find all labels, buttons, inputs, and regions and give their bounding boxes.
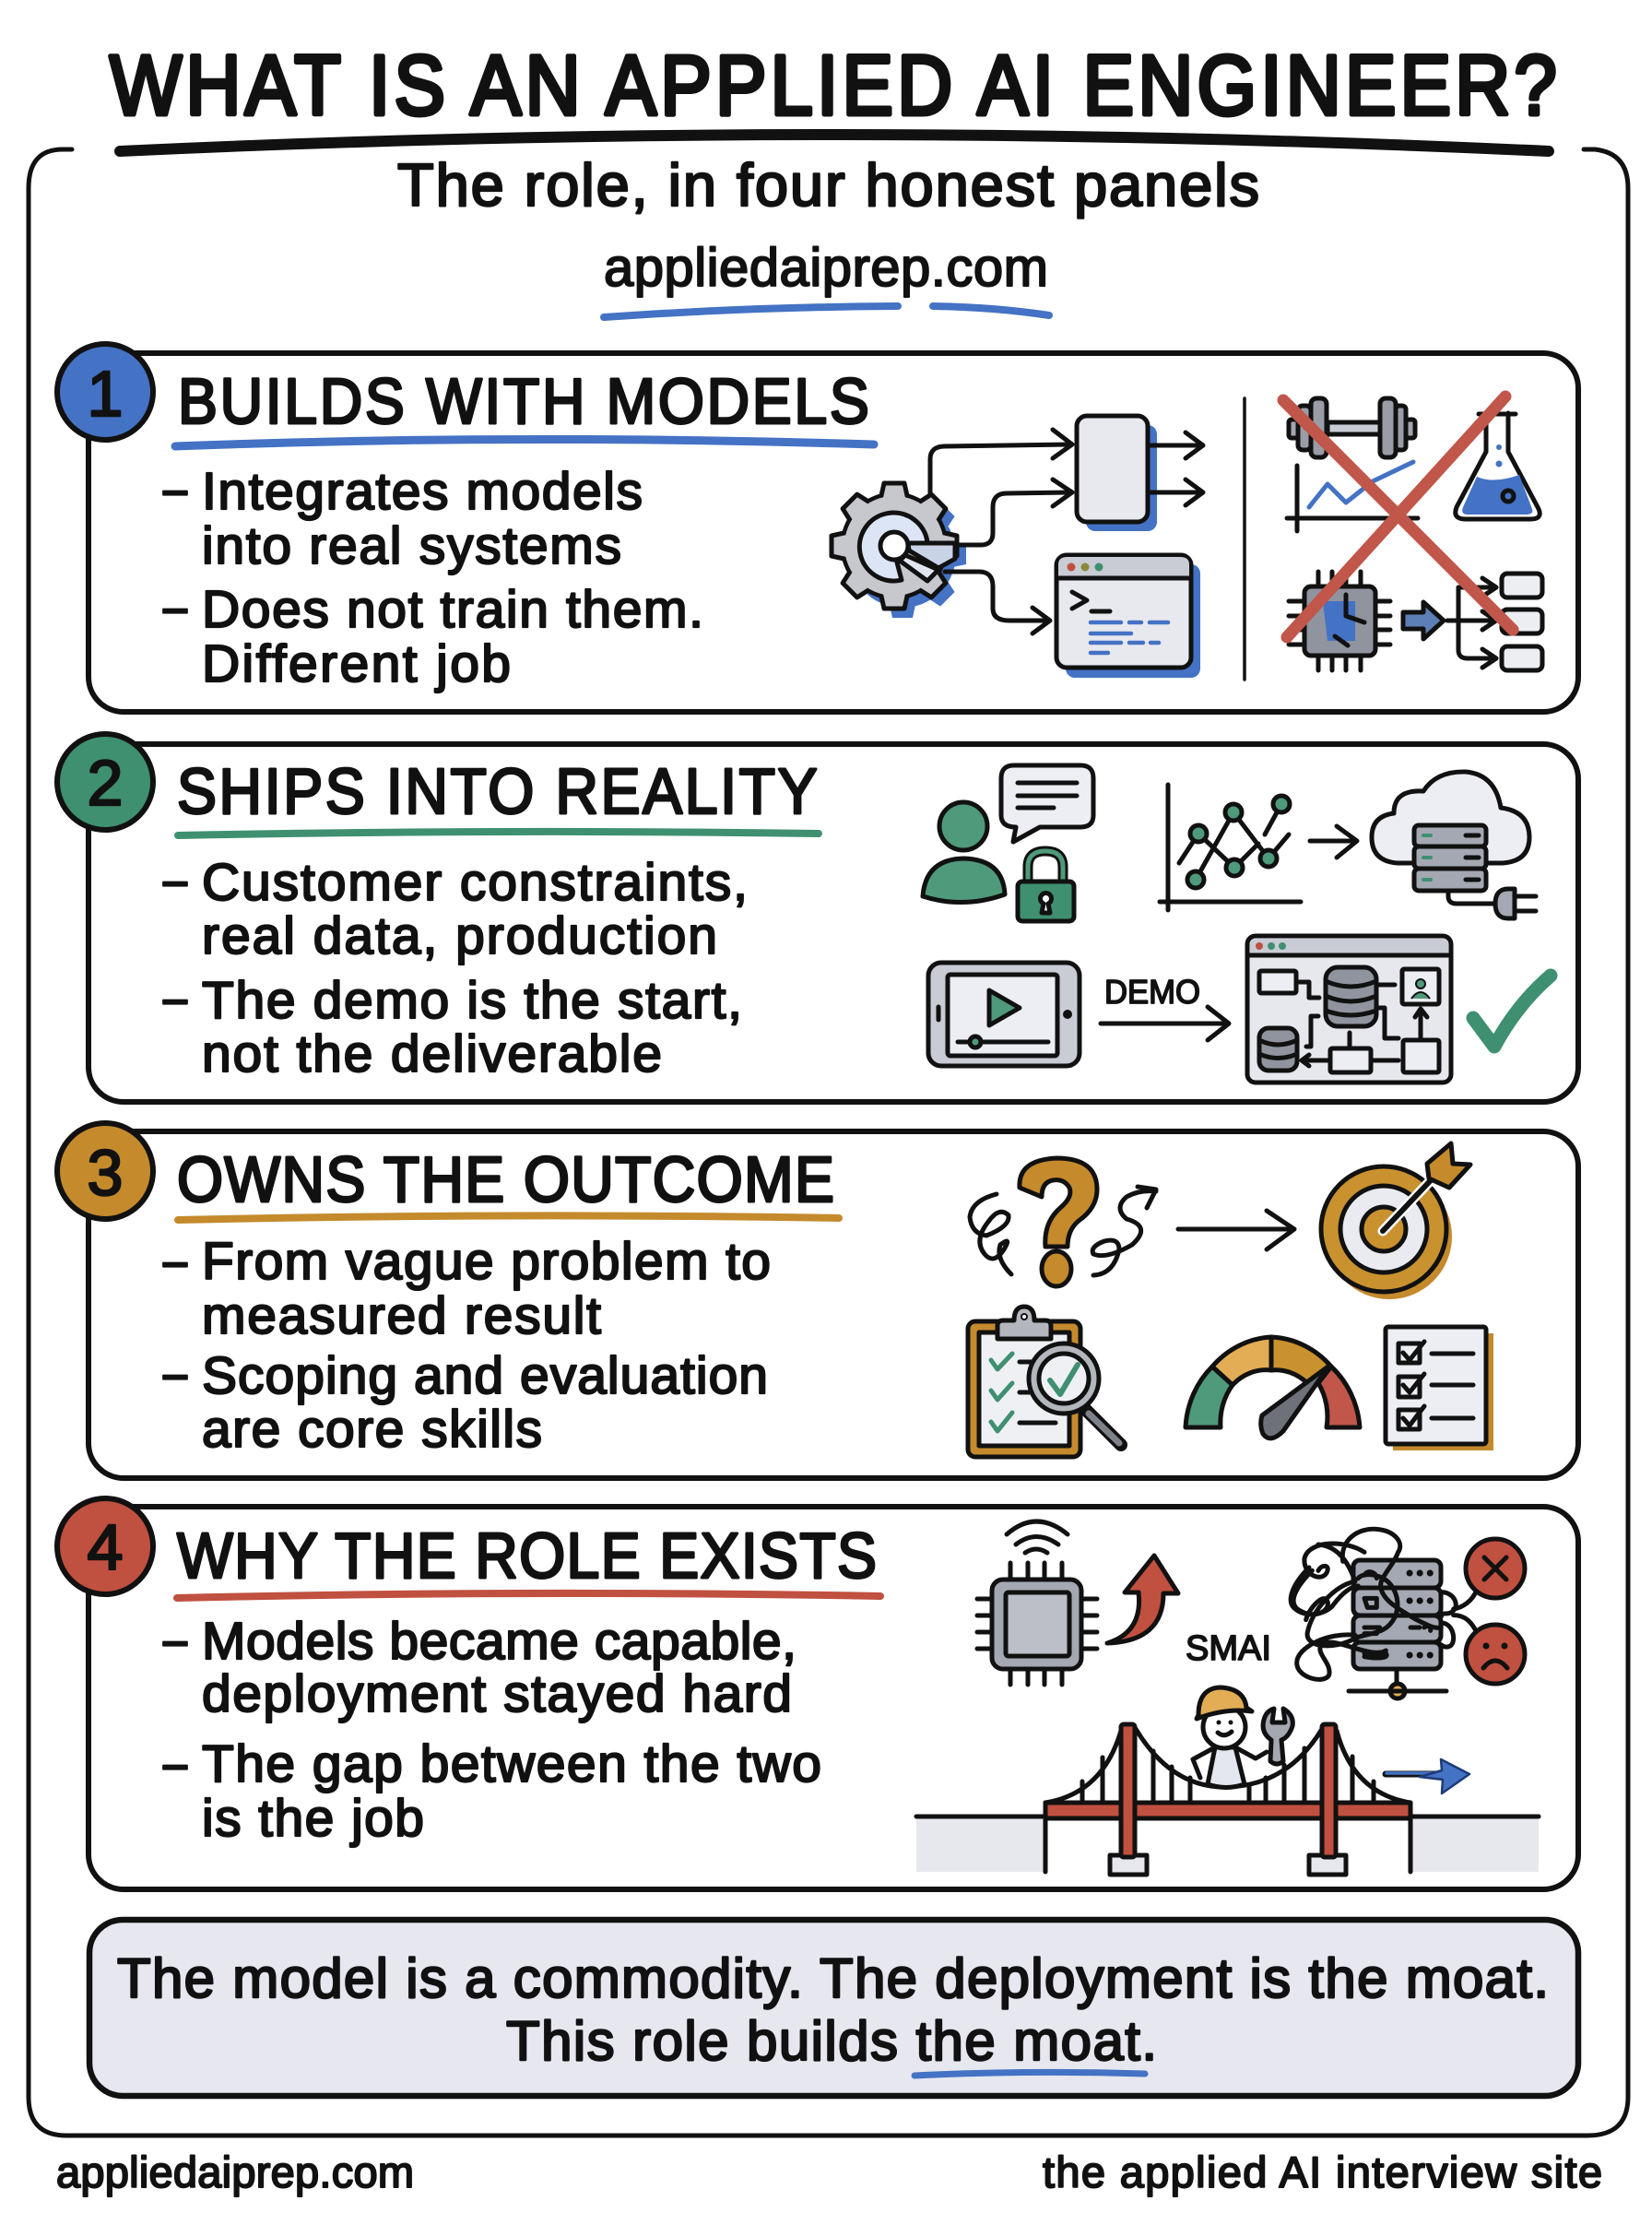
- title underline: [120, 135, 1549, 151]
- bullets 4: is the job: [202, 1789, 424, 1848]
- bullets 3: –: [163, 1343, 187, 1402]
- title: WHAT IS AN APPLIED AI ENGINEER?: [110, 38, 1557, 133]
- icon: data chart to cloud servers: [1160, 772, 1536, 918]
- number badge 4: [57, 1498, 153, 1594]
- number badge 1: [57, 344, 153, 440]
- bullets 1: Integrates models: [202, 462, 643, 521]
- icon: checklist: [1386, 1327, 1493, 1450]
- icon: demo video tablet: [928, 963, 1080, 1066]
- icon: customer, message, lock: [923, 765, 1093, 921]
- label: SMAI: SMAI: [1186, 1629, 1271, 1668]
- icon: tangled deployment server: [1291, 1529, 1525, 1698]
- icon: model chip improving: [977, 1521, 1178, 1685]
- bullets 1: [163, 459, 703, 693]
- bullets 3: measured result: [202, 1286, 601, 1345]
- panel 1: builds with models: [57, 344, 1578, 712]
- bullets 2: Customer constraints,: [202, 853, 748, 912]
- number badge 2: 2: [88, 747, 123, 819]
- icon: flask: [1456, 413, 1540, 519]
- bullets 1: Does not train them.: [202, 580, 703, 639]
- bullets 3: From vague problem to: [202, 1232, 771, 1291]
- bullets 3: Scoping and evaluation: [202, 1346, 768, 1405]
- bullets 2: The demo is the start,: [202, 971, 742, 1030]
- icon: vague question to target: [970, 1143, 1470, 1299]
- bullets 2: –: [163, 968, 187, 1027]
- bullets 4: –: [163, 1734, 187, 1793]
- bullets 2: –: [163, 850, 187, 909]
- icon: green check: [1473, 976, 1551, 1047]
- bullets 3: –: [163, 1231, 187, 1290]
- heading 3: OWNS THE OUTCOME: [177, 1144, 834, 1216]
- subtitle: The role, in four honest panels: [397, 151, 1259, 219]
- callout: the moat: The model is a commodity. The deployment is the moat.: [117, 1947, 1549, 2009]
- number badge 2: [57, 734, 153, 830]
- bullets 2: real data, production: [202, 906, 717, 965]
- bullets 1: into real systems: [202, 516, 621, 575]
- icon: crossed-out training work: [1283, 396, 1542, 670]
- bullets 4: –: [163, 1610, 187, 1669]
- icon: production system window: [1247, 936, 1451, 1083]
- label: demo arrow: DEMO: [1104, 973, 1200, 1011]
- panel 3: owns the outcome: [57, 1123, 1578, 1478]
- icon: bridge with engineer: [916, 1687, 1539, 1875]
- bullets 1: Different job: [202, 634, 511, 693]
- bullets 4: The gap between the two: [202, 1734, 821, 1793]
- callout: the moat: This role builds the moat.: [506, 2010, 1157, 2072]
- bullets 1: –: [163, 459, 187, 518]
- number badge 4: 4: [88, 1511, 123, 1583]
- site link: appliedaiprep.com: [604, 238, 1048, 298]
- number badge 3: [57, 1123, 153, 1219]
- icon: chip to classifier tree: [1289, 572, 1542, 670]
- icon: dumbbell: [1289, 398, 1415, 457]
- label: demo arrow: [1101, 973, 1229, 1040]
- callout: the moat: [89, 1920, 1578, 2096]
- icon: training curve: [1287, 462, 1418, 531]
- icon: gauge: [1186, 1337, 1360, 1438]
- heading 4: WHY THE ROLE EXISTS: [177, 1521, 877, 1592]
- footer right: the applied AI interview site: [1043, 2148, 1602, 2196]
- bullets 4: [163, 1610, 821, 1848]
- panel 2: ships into reality: [57, 734, 1578, 1102]
- footer left: appliedaiprep.com: [56, 2148, 414, 2196]
- bullets 2: not the deliverable: [202, 1024, 662, 1083]
- divider: [1243, 398, 1246, 680]
- bullets 1: –: [163, 577, 187, 636]
- bullets 2: [163, 850, 748, 1083]
- bullets 3: are core skills: [202, 1400, 542, 1459]
- number badge 3: 3: [88, 1137, 123, 1209]
- bullets 4: deployment stayed hard: [202, 1664, 792, 1723]
- heading 2: SHIPS INTO REALITY: [177, 756, 818, 828]
- number badge 1: 1: [88, 358, 123, 430]
- panel 4: why the role exists: [57, 1498, 1578, 1889]
- bullets 4: Models became capable,: [202, 1612, 796, 1671]
- icon: clipboard with magnifier: [968, 1307, 1121, 1457]
- bullets 3: [163, 1231, 771, 1459]
- icon: gear routing to services: [832, 416, 1203, 678]
- red cross-out: [1283, 396, 1513, 637]
- heading 1: BUILDS WITH MODELS: [178, 366, 869, 438]
